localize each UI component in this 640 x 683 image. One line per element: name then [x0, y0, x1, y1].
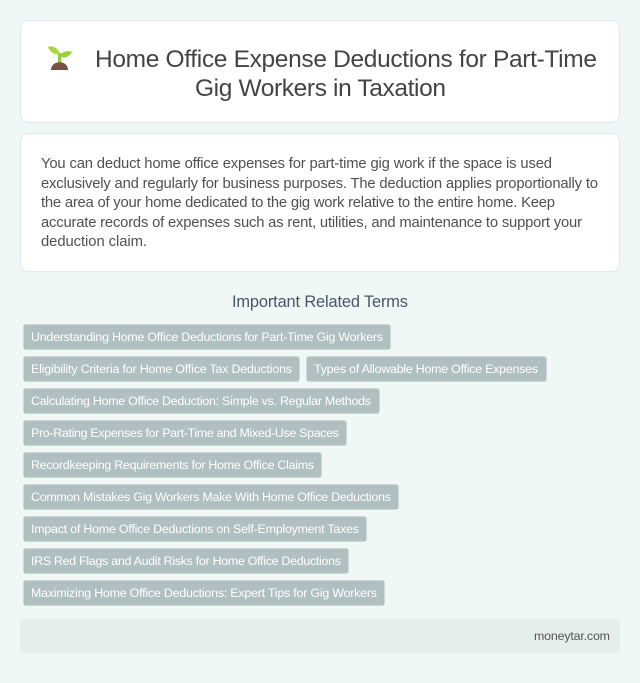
tag	[24, 324, 390, 350]
tag: Recordkeeping Requirements for Home Office Claims	[31, 458, 314, 472]
tag: Calculating Home Office Deduction: Simple vs. Regular Methods	[31, 394, 371, 408]
title: Home Office Expense Deductions for Part-Time	[95, 46, 597, 73]
tag: Eligibility Criteria for Home Office Tax Deductions	[31, 362, 292, 376]
summary text: deduction claim.	[41, 234, 147, 250]
panel: related terms tags	[24, 324, 546, 606]
tag	[24, 388, 380, 414]
summary text: the area of your home dedicated to the gig work relative to the entire home. Keep	[41, 195, 555, 211]
panel: summary card	[20, 134, 620, 272]
summary text: You can deduct home office expenses for part-time gig work if the space is used	[41, 156, 552, 172]
tag: Types of Allowable Home Office Expenses	[314, 362, 538, 376]
tag: Impact of Home Office Deductions on Self-Employment Taxes	[31, 522, 359, 536]
tag	[24, 420, 346, 446]
title: Gig Workers in Taxation	[195, 75, 446, 102]
tag: IRS Red Flags and Audit Risks for Home Office Deductions	[31, 554, 341, 568]
tag: Maximizing Home Office Deductions: Expert Tips for Gig Workers	[31, 586, 377, 600]
title	[95, 46, 597, 102]
tag: Common Mistakes Gig Workers Make With Home Office Deductions	[31, 490, 391, 504]
icon: seedling	[48, 46, 72, 70]
tag: Pro-Rating Expenses for Part-Time and Mixed-Use Spaces	[31, 426, 339, 440]
tag	[24, 484, 398, 510]
tag	[306, 356, 546, 382]
footer: moneytar.com	[534, 629, 610, 643]
panel: title card	[20, 20, 620, 122]
tag: Understanding Home Office Deductions for Part-Time Gig Workers	[31, 330, 383, 344]
tag	[24, 356, 300, 382]
tag	[24, 580, 384, 606]
summary text: exclusively and regularly for business purposes. The deduction applies proportionally to	[41, 176, 598, 192]
summary text	[41, 156, 598, 250]
footer	[20, 619, 620, 653]
tag	[24, 452, 322, 478]
heading: related terms: Important Related Terms	[232, 293, 408, 311]
tag	[24, 548, 348, 574]
tag	[24, 516, 366, 542]
summary text: accurate records of expenses such as rent, utilities, and maintenance to support your	[41, 215, 582, 231]
